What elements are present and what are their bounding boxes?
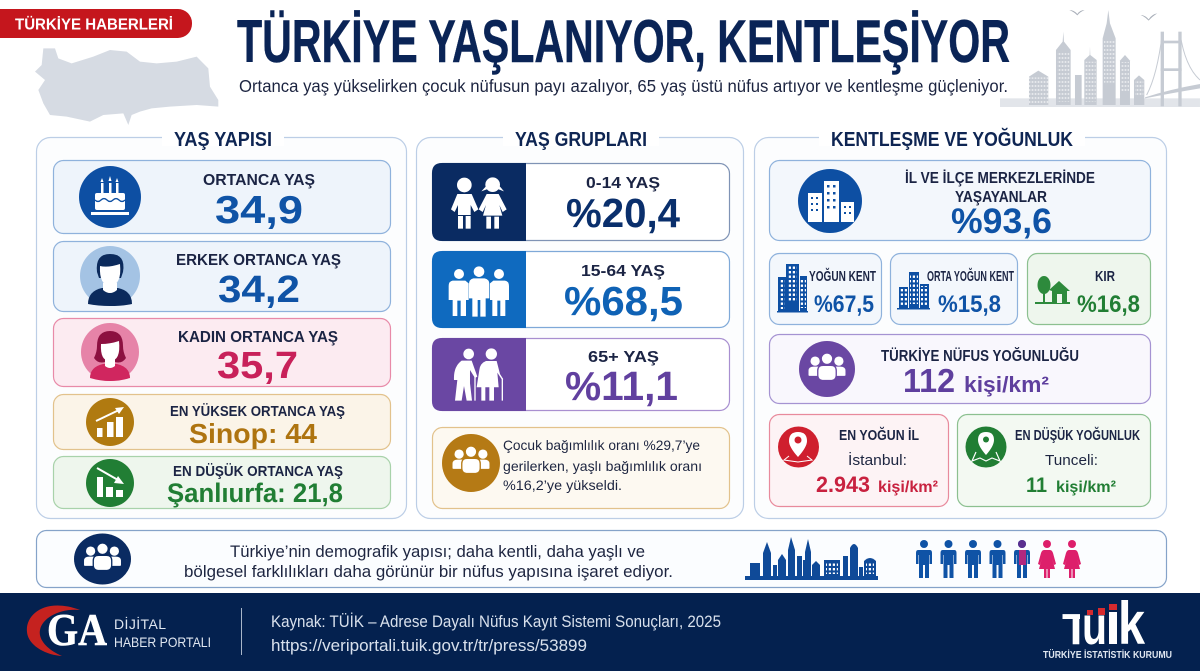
value: Şanlıurfa: 21,8 bbox=[167, 478, 343, 508]
label bbox=[905, 169, 1095, 206]
callout text: gerilerken, yaşlı bağımlılık oranı bbox=[503, 458, 702, 474]
card: 15-64 yaş bbox=[432, 251, 730, 328]
icon: medium buildings bbox=[897, 272, 930, 310]
value bbox=[816, 472, 938, 497]
label: TÜRKİYE NÜFUS YOĞUNLUĞU bbox=[881, 346, 1079, 365]
value: 2.943 bbox=[816, 472, 870, 497]
label: 0-14 YAŞ bbox=[586, 175, 660, 192]
logo: TÜİK bbox=[1043, 590, 1172, 661]
icon: family bbox=[442, 434, 500, 492]
icon: red location pin bbox=[778, 426, 819, 468]
card: orta yoğun kent bbox=[890, 254, 1018, 324]
callout: dependency ratios bbox=[432, 428, 730, 508]
card: en yoğun il bbox=[770, 414, 948, 506]
icon: tree and house bbox=[1035, 276, 1070, 304]
label: EN DÜŞÜK ORTANCA YAŞ bbox=[173, 463, 343, 480]
label: KIR bbox=[1095, 269, 1115, 285]
card: en düşük yoğunluk bbox=[958, 414, 1150, 506]
panel: yaş yapısı bbox=[36, 129, 406, 518]
panel: yaş grupları bbox=[416, 129, 744, 518]
icon: falling chart bbox=[86, 459, 134, 507]
value: %68,5 bbox=[564, 278, 683, 324]
icon: adults bbox=[449, 266, 509, 317]
value: %16,8 bbox=[1077, 291, 1140, 318]
value: 112 bbox=[903, 362, 955, 399]
place: Tunceli: bbox=[1045, 452, 1098, 469]
value: 35,7 bbox=[217, 345, 298, 387]
value: 34,9 bbox=[215, 189, 303, 232]
header tag bbox=[0, 9, 192, 38]
icon: children bbox=[451, 177, 507, 229]
icon: man avatar bbox=[80, 246, 140, 306]
icon: elderly couple bbox=[454, 348, 503, 401]
summary text bbox=[184, 543, 673, 581]
label: ERKEK ORTANCA YAŞ bbox=[176, 252, 341, 269]
heading: yaş grupları: YAŞ GRUPLARI bbox=[515, 129, 647, 151]
label: YAŞAYANLAR bbox=[955, 189, 1047, 206]
icon: birthday cake bbox=[79, 166, 141, 228]
label: KADIN ORTANCA YAŞ bbox=[178, 329, 338, 346]
card: en düşük ortanca yaş bbox=[54, 456, 390, 508]
summary banner bbox=[36, 530, 1166, 588]
card: kadın ortanca yaş bbox=[54, 318, 390, 387]
card: ortanca yaş bbox=[54, 160, 390, 234]
icon: buildings bbox=[798, 169, 862, 233]
logo: GA: DİJİTAL bbox=[114, 615, 166, 632]
card: en yüksek ortanca yaş bbox=[54, 394, 390, 450]
summary text: bölgesel farklılıkları daha görünür bir nüfus yapısına işaret ediyor. bbox=[184, 563, 673, 581]
label: YOĞUN KENT bbox=[809, 267, 876, 285]
icon: population figures bbox=[916, 540, 1081, 578]
logo: GA bbox=[27, 604, 211, 656]
label: ORTANCA YAŞ bbox=[203, 172, 315, 189]
card: 0-14 yaş bbox=[432, 163, 730, 241]
subtitle: Ortanca yaş yükselirken çocuk nüfusun payı azalıyor, 65 yaş üstü nüfus artıyor ve kentleşme güçleniyor. bbox=[239, 76, 1008, 96]
label: İL VE İLÇE MERKEZLERİNDE bbox=[905, 169, 1095, 187]
heading: yaş yapısı: YAŞ YAPISI bbox=[174, 129, 272, 151]
value: %67,5 bbox=[814, 291, 874, 318]
value: kişi/km² bbox=[878, 479, 938, 496]
logo: GA: GA bbox=[47, 604, 107, 655]
icon: woman avatar bbox=[81, 323, 139, 381]
label: ORTA YOĞUN KENT bbox=[927, 267, 1014, 285]
logo: TÜİK: k bbox=[1118, 590, 1146, 657]
value: kişi/km² bbox=[964, 372, 1049, 397]
icon: population bbox=[799, 341, 855, 397]
footer bbox=[0, 590, 1200, 671]
label: 65+ YAŞ bbox=[588, 349, 659, 366]
place: İstanbul: bbox=[848, 451, 907, 469]
value bbox=[1026, 474, 1116, 497]
value: Sinop: 44 bbox=[189, 418, 317, 449]
label: EN YÜKSEK ORTANCA YAŞ bbox=[170, 403, 345, 420]
logo: GA: HABER PORTALI bbox=[114, 634, 211, 650]
card: yoğun kent bbox=[770, 254, 882, 324]
source text bbox=[271, 612, 721, 655]
source text: https://veriportali.tuik.gov.tr/tr/press/53899 bbox=[271, 637, 587, 655]
panel: kentleşme ve yoğunluk bbox=[754, 127, 1166, 518]
logo: TÜİK: u bbox=[1082, 596, 1107, 656]
value: %20,4 bbox=[566, 190, 680, 236]
city skyline with bridge bbox=[1000, 10, 1200, 107]
value bbox=[903, 362, 1049, 399]
value: kişi/km² bbox=[1056, 479, 1116, 496]
value: 11 bbox=[1026, 474, 1047, 497]
map of Türkiye bbox=[35, 48, 218, 125]
icon: tall buildings bbox=[777, 264, 808, 312]
card: erkek ortanca yaş bbox=[54, 242, 390, 312]
header tag: TÜRKİYE HABERLERİ bbox=[15, 16, 173, 34]
source text: Kaynak: TÜİK – Adrese Dayalı Nüfus Kayıt Sistemi Sonuçları, 2025 bbox=[271, 612, 721, 631]
icon: green map pin bbox=[966, 426, 1006, 468]
callout text: %16,2’ye yükseldi. bbox=[503, 477, 622, 493]
card: türkiye nüfus yoğunluğu bbox=[770, 334, 1150, 404]
card: 65+ yaş bbox=[432, 338, 730, 411]
icon: rising chart bbox=[86, 398, 134, 446]
callout text bbox=[503, 437, 702, 493]
label: EN YOĞUN İL bbox=[839, 426, 919, 444]
value: 34,2 bbox=[218, 269, 300, 311]
icon: community bbox=[74, 534, 131, 584]
callout text: Çocuk bağımlılık oranı %29,7’ye bbox=[503, 437, 700, 453]
value: %93,6 bbox=[951, 202, 1052, 241]
logo: TÜİK: TÜRKİYE İSTATİSTİK KURUMU bbox=[1043, 648, 1172, 661]
heading: kentleşme ve yoğunluk: KENTLEŞME VE YOĞUNLUK bbox=[831, 127, 1073, 151]
value: %15,8 bbox=[938, 291, 1001, 318]
logo: TÜİK: T bbox=[1062, 605, 1090, 654]
icon: navy skyline bbox=[745, 537, 878, 580]
value: %11,1 bbox=[565, 363, 678, 409]
summary text: Türkiye’nin demografik yapısı; daha kentli, daha yaşlı ve bbox=[230, 543, 645, 561]
card: il ve ilçe merkezleri bbox=[770, 160, 1150, 241]
label: EN DÜŞÜK YOĞUNLUK bbox=[1015, 426, 1140, 444]
label: 15-64 YAŞ bbox=[581, 263, 665, 280]
card: kır bbox=[1028, 254, 1150, 324]
